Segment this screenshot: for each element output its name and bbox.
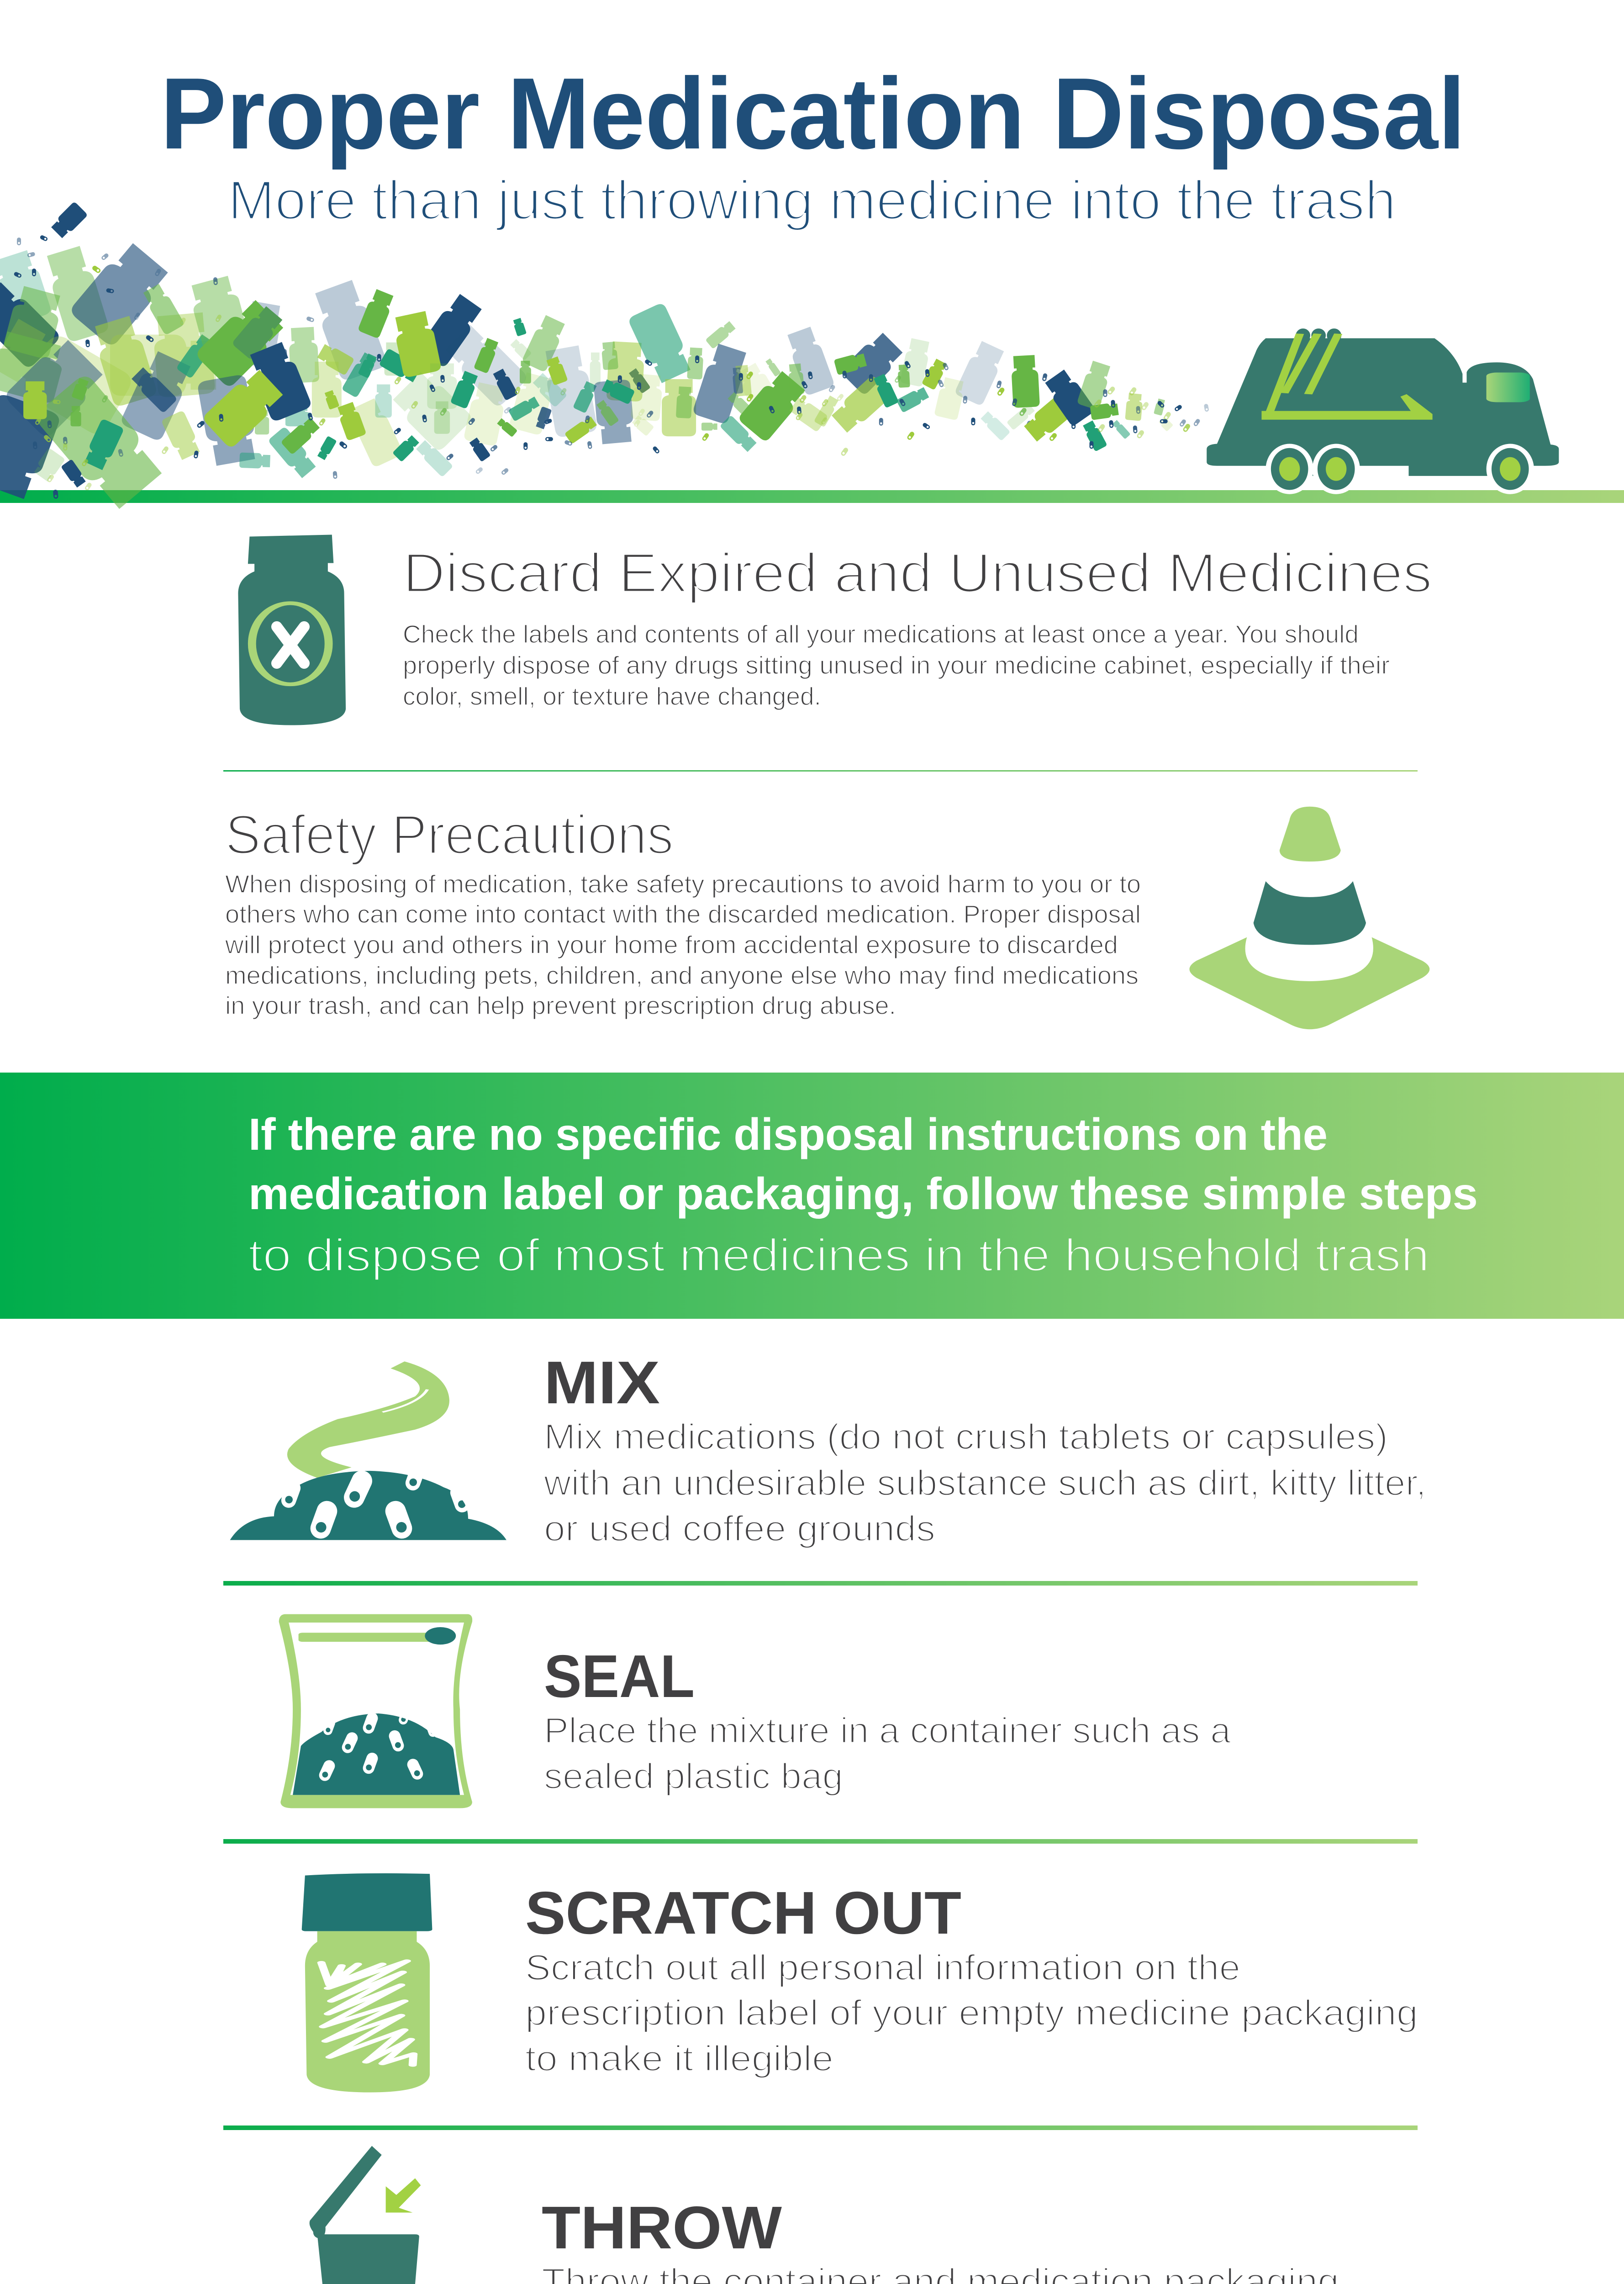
text: safety precautions body: in your trash, and can help prevent prescription drug abuse. xyxy=(225,991,896,1020)
icon: scratched-out bottle xyxy=(302,1873,432,2093)
text: discard expired body: Check the labels and contents of all your medications at least once a year. You should xyxy=(403,620,1359,648)
icon: expired bottle xyxy=(238,534,346,725)
text: safety precautions body: When disposing of medication, take safety precautions to avoid harm to you or to xyxy=(225,870,1141,898)
heading: seal: SEAL xyxy=(544,1643,695,1710)
heading: scratch out: SCRATCH OUT xyxy=(525,1879,961,1946)
text: seal body: Place the mixture in a container such as a xyxy=(544,1710,1231,1750)
road bar xyxy=(0,490,1624,503)
text: seal body xyxy=(544,1710,1231,1796)
text: discard expired body: color, smell, or texture have changed. xyxy=(403,682,821,710)
icon: sealed plastic bag xyxy=(279,1614,472,1808)
text: discard expired body xyxy=(403,620,1390,710)
title: Proper Medication Disposal xyxy=(160,57,1466,170)
text: banner bold lines: If there are no specific disposal instructions on the xyxy=(248,1109,1328,1159)
subtitle: More than just throwing medicine into the trash xyxy=(228,169,1396,231)
text: mix body: Mix medications (do not crush tablets or capsules) xyxy=(544,1416,1388,1457)
text: safety precautions body: will protect you and others in your home from accidental exposure to discarded xyxy=(225,931,1118,959)
panel: instructions banner xyxy=(0,1073,1624,1319)
text: mix body: with an undesirable substance such as dirt, kitty litter, xyxy=(543,1462,1426,1503)
heading: mix: MIX xyxy=(544,1349,660,1416)
text: safety precautions body: others who can come into contact with the discarded medication. Proper disposal xyxy=(225,900,1141,928)
text: seal body: sealed plastic bag xyxy=(544,1755,843,1796)
icon: trash can with arrow xyxy=(310,2146,443,2284)
heading: throw: THROW xyxy=(542,2194,782,2261)
text: safety precautions body: medications, including pets, children, and anyone else who may find medications xyxy=(225,961,1139,989)
text: mix body: or used coffee grounds xyxy=(544,1508,935,1549)
icon: mixture mound with swirl xyxy=(230,1361,506,1542)
illustration: stream of scattered medicine bottles and pills xyxy=(0,201,1209,513)
text: safety precautions body xyxy=(225,870,1141,1020)
text: scratch out body: prescription label of your empty medicine packaging xyxy=(525,1992,1418,2033)
text: discard expired body: properly dispose of any drugs sitting unused in your medicine cabinet, especially if their xyxy=(403,651,1390,679)
icon: traffic cone xyxy=(1189,807,1429,1029)
heading: discard expired and unused medicines: Discard Expired and Unused Medicines xyxy=(403,542,1432,604)
text: scratch out body: Scratch out all personal information on the xyxy=(525,1947,1240,1988)
text: banner bold lines: medication label or packaging, follow these simple steps xyxy=(248,1168,1478,1219)
text: banner bold lines xyxy=(248,1109,1478,1219)
icon: garbage truck xyxy=(1207,328,1559,494)
heading: safety precautions: Safety Precautions xyxy=(225,804,674,866)
text: scratch out body: to make it illegible xyxy=(525,2038,833,2078)
text: scratch out body xyxy=(525,1947,1418,2078)
text: mix body xyxy=(543,1416,1426,1549)
text: banner light line: to dispose of most medicines in the household trash xyxy=(248,1230,1429,1281)
